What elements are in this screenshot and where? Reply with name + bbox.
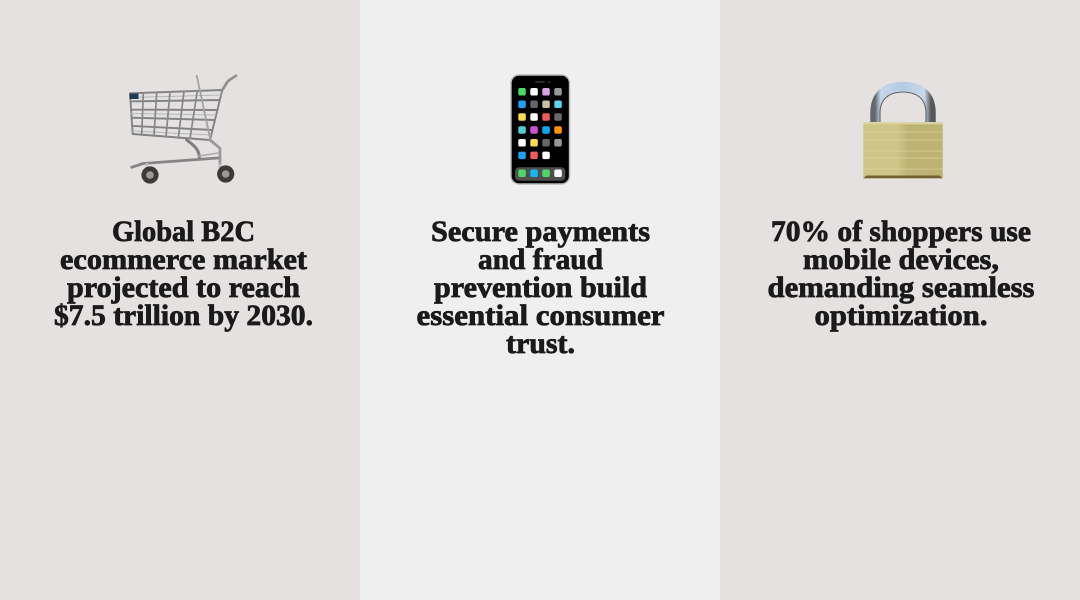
heading: market size: ecommerce market [60, 243, 307, 276]
panel: market size [0, 0, 360, 600]
heading: mobile shoppers: demanding seamless [768, 271, 1034, 304]
heading: consumer trust: and fraud [478, 243, 603, 276]
icon: shopping cart [130, 76, 236, 184]
heading: consumer trust: prevention build [434, 271, 647, 304]
heading: market size: Global B2C [112, 215, 255, 248]
heading: market size: projected to reach [67, 271, 300, 304]
heading: consumer trust: Secure payments [431, 215, 650, 248]
heading: mobile shoppers: mobile devices, [803, 243, 999, 276]
heading: consumer trust [416, 215, 664, 360]
heading: consumer trust: essential consumer [416, 299, 664, 332]
icon: smartphone [511, 75, 570, 184]
heading: mobile shoppers [768, 215, 1034, 332]
panel: consumer trust [360, 0, 720, 600]
panel: mobile shoppers [720, 0, 1080, 600]
heading: market size: $7.5 trillion by 2030. [54, 299, 313, 332]
heading: market size [54, 215, 313, 332]
heading: consumer trust: trust. [506, 327, 575, 360]
heading: mobile shoppers: optimization. [814, 299, 988, 332]
heading: mobile shoppers: 70% of shoppers use [771, 215, 1031, 248]
icon: padlock [863, 86, 943, 178]
